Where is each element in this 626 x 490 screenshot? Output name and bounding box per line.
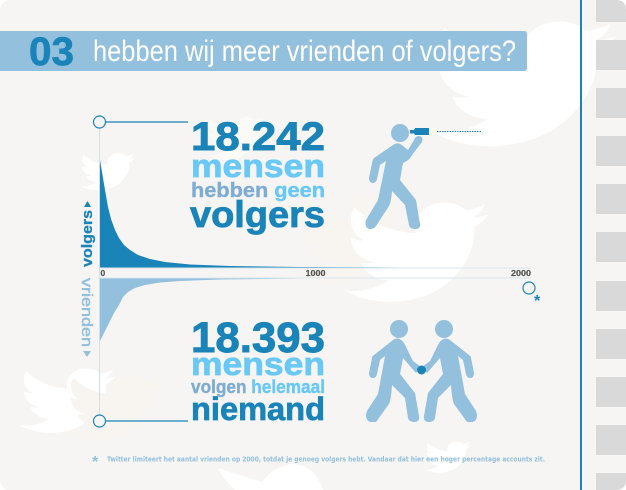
axis label 2000: 2000 (511, 268, 531, 278)
axis band lines (100, 268, 531, 278)
asterisk: * (534, 293, 541, 310)
stat block: following nobody: mensen (191, 346, 325, 382)
stat block: no followers: volgers (190, 194, 325, 235)
chart: distribution of followers and friends (78, 116, 541, 427)
friends axis label: vrienden (78, 278, 95, 347)
vertical guide line (98, 128, 100, 416)
axis label 1000: 1000 (306, 268, 326, 278)
icon: two people holding hands (366, 320, 477, 422)
telescope (410, 128, 429, 135)
stat block: no followers: 18.242 (191, 115, 325, 159)
footnote: Twitter limiteert het aantal vrienden op 2000, totdat je genoeg volgers hebt. Vandaar dat hier een hoger percentage accounts zit. (107, 456, 545, 464)
stat block: following nobody (191, 314, 325, 427)
followers axis label: volgers (79, 210, 96, 267)
friends curve (100, 278, 420, 341)
stat block: following nobody: 18.393 (191, 314, 325, 362)
stat block: following nobody: niemand (191, 391, 325, 427)
title: hebben wij meer vrienden of volgers? (93, 35, 516, 68)
friends arrow (83, 351, 91, 357)
axis label 0: 0 (100, 268, 106, 278)
footnote (92, 454, 545, 471)
line of sight (437, 130, 481, 132)
film strip squares (596, 0, 626, 490)
stat block: no followers (190, 115, 325, 235)
bottom marker (94, 415, 188, 427)
stat block: following nobody: volgen helemaal (191, 377, 325, 397)
joined hands (417, 366, 426, 374)
stat block: no followers: hebben geen (191, 180, 325, 202)
followers arrow (84, 201, 91, 207)
vertical divider (580, 0, 582, 490)
section number: 03 (29, 30, 74, 74)
followers curve (100, 160, 400, 268)
limit marker (523, 282, 535, 294)
footnote: * (92, 454, 99, 471)
top marker (94, 116, 188, 128)
icon: person with telescope (366, 124, 481, 229)
header bar (0, 30, 527, 74)
stat block: no followers: mensen (191, 148, 325, 184)
